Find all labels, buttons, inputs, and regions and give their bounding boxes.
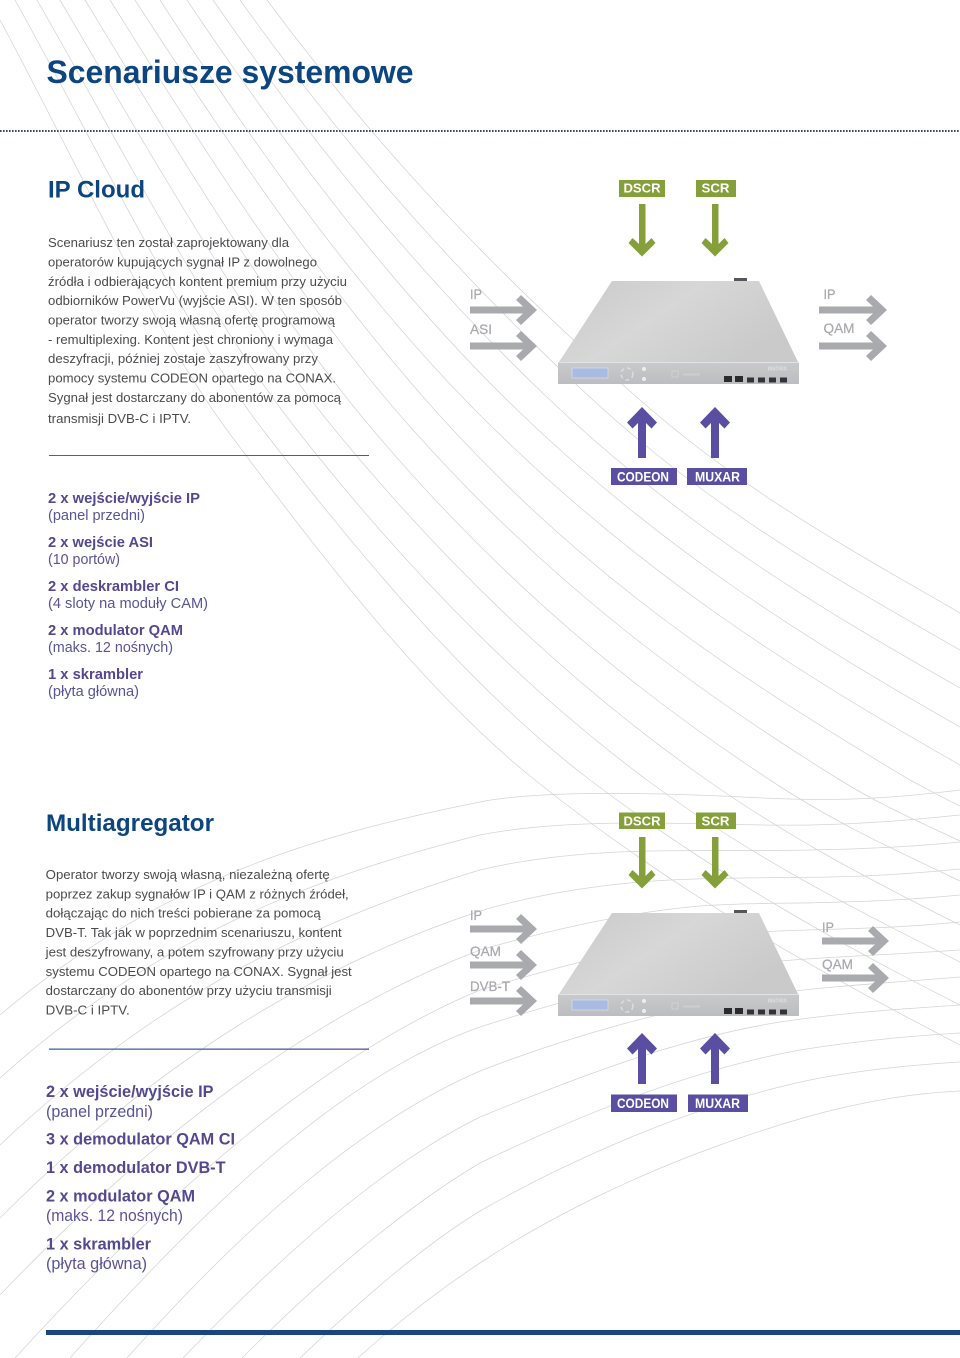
text block: IP Cloud description: operatorów kupujących sygnał IP z dowolnego bbox=[48, 254, 317, 270]
arrow: MUXAR up bbox=[700, 1033, 730, 1084]
label: MUXAR: MUXAR bbox=[695, 470, 740, 484]
arrow label: QAM output: QAM bbox=[824, 321, 854, 336]
text block: Multiagregator description: systemu CODEON opartego na CONAX. Sygnał jest bbox=[46, 964, 352, 979]
text block: Multiagregator description: poprzez zakup sygnałów IP i QAM z różnych źródeł, bbox=[46, 886, 349, 902]
feature list: IP Cloud: (maks. 12 nośnych) bbox=[48, 640, 173, 656]
arrow: DVB-T input bbox=[470, 986, 537, 1016]
arrow label: IP output: IP bbox=[822, 920, 834, 935]
arrow label: QAM output: QAM bbox=[822, 957, 853, 972]
arrow: MUXAR up bbox=[700, 407, 730, 458]
arrow: CODEON up bbox=[627, 407, 657, 458]
text block: IP Cloud description: pomocy systemu CODEON opartego na CONAX. bbox=[48, 370, 336, 386]
label: SCR bbox=[696, 180, 736, 197]
arrow: DSCR down bbox=[628, 837, 656, 888]
feature list: IP Cloud: 2 x modulator QAM bbox=[48, 623, 183, 639]
arrow label: DVB-T input: DVB-T bbox=[470, 979, 510, 994]
text block: IP Cloud description: transmisji DVB-C i IPTV. bbox=[48, 411, 191, 426]
label: CODEON: CODEON bbox=[617, 470, 669, 484]
arrow: IP output bbox=[819, 295, 887, 325]
feature list: Multiagregator: (płyta główna) bbox=[46, 1255, 147, 1273]
arrow: QAM output bbox=[822, 963, 889, 993]
feature list: Multiagregator: 1 x demodulator DVB-T bbox=[46, 1159, 226, 1177]
label: DSCR: DSCR bbox=[624, 181, 661, 196]
arrow: QAM input bbox=[470, 950, 537, 980]
feature list: IP Cloud: (płyta główna) bbox=[48, 684, 139, 700]
feature list: IP Cloud: (4 sloty na moduły CAM) bbox=[48, 596, 208, 612]
text block: IP Cloud description bbox=[48, 235, 347, 426]
heading: IP Cloud: IP Cloud bbox=[48, 176, 145, 204]
text block: IP Cloud description: Sygnał jest dostarczany do abonentów za pomocą bbox=[48, 390, 342, 405]
feature list: Multiagregator: (maks. 12 nośnych) bbox=[46, 1207, 183, 1225]
text block: IP Cloud description: Scenariusz ten został zaprojektowany dla bbox=[48, 235, 290, 250]
feature list: Multiagregator: 2 x wejście/wyjście IP bbox=[46, 1083, 214, 1101]
device bbox=[558, 278, 799, 384]
arrow: ASI input bbox=[470, 331, 537, 361]
label: SCR bbox=[696, 812, 736, 829]
text block: IP Cloud description: odbiorników PowerVu (wyjście ASI). W ten sposób bbox=[48, 293, 342, 308]
arrow: CODEON up bbox=[627, 1033, 657, 1084]
arrow: DSCR down bbox=[628, 204, 656, 256]
feature list: IP Cloud: 2 x wejście/wyjście IP bbox=[48, 491, 200, 507]
text block: IP Cloud description: deszyfracji, później zostaje zaszyfrowany przy bbox=[48, 351, 318, 366]
device: MATRIX bbox=[768, 998, 787, 1004]
arrow: SCR down bbox=[702, 204, 728, 256]
text block: Multiagregator description: jest deszyfrowany, a potem szyfrowany przy użyciu bbox=[45, 944, 344, 960]
device bbox=[558, 910, 799, 1016]
arrow label: IP input: IP bbox=[470, 908, 482, 923]
feature list: IP Cloud: (10 portów) bbox=[48, 552, 120, 568]
footer bar bbox=[46, 1330, 960, 1335]
label: MUXAR: MUXAR bbox=[695, 1096, 740, 1111]
feature list: IP Cloud: 2 x wejście ASI bbox=[48, 535, 153, 551]
arrow: QAM output bbox=[819, 331, 887, 361]
arrow: IP input bbox=[470, 914, 537, 944]
label: CODEON: CODEON bbox=[617, 1096, 669, 1111]
arrow label: IP output: IP bbox=[824, 287, 836, 302]
diagram: Multiagregator bbox=[470, 812, 889, 1112]
arrow label: IP input: IP bbox=[470, 287, 482, 302]
arrow: SCR down bbox=[702, 837, 728, 888]
feature list: IP Cloud: 1 x skrambler bbox=[48, 667, 143, 683]
text block: IP Cloud description: - remultiplexing. Kontent jest chroniony i wymaga bbox=[48, 332, 334, 347]
text block: Multiagregator description: DVB-C i IPTV. bbox=[46, 1002, 130, 1018]
text block: Multiagregator description: dostarczany do abonentów przy użyciu transmisji bbox=[46, 983, 332, 998]
feature list: Multiagregator: 3 x demodulator QAM CI bbox=[46, 1130, 235, 1148]
feature list: IP Cloud: (panel przedni) bbox=[48, 508, 145, 524]
feature list: Multiagregator: 1 x skrambler bbox=[46, 1236, 152, 1254]
feature list: Multiagregator: (panel przedni) bbox=[46, 1103, 153, 1121]
feature list: Multiagregator bbox=[46, 1083, 235, 1273]
text block: IP Cloud description: operator tworzy swoją własną ofertę programową bbox=[48, 312, 336, 328]
label: SCR: SCR bbox=[702, 181, 730, 196]
feature list: IP Cloud: 2 x deskrambler CI bbox=[48, 579, 179, 595]
arrow: IP output bbox=[822, 926, 889, 956]
text block: IP Cloud description: źródła i odbierających kontent premium przy użyciu bbox=[48, 274, 347, 289]
title: Scenariusze systemowe bbox=[46, 54, 414, 90]
arrow label: QAM input: QAM bbox=[470, 944, 501, 959]
text block: Multiagregator description bbox=[45, 867, 352, 1018]
arrow: IP input bbox=[470, 295, 537, 325]
arrow label: ASI input: ASI bbox=[470, 322, 492, 337]
device: MATRIX bbox=[768, 366, 787, 372]
heading: Multiagregator: Multiagregator bbox=[46, 810, 214, 837]
feature list: Multiagregator: 2 x modulator QAM bbox=[46, 1188, 195, 1206]
text block: Multiagregator description: Operator tworzy swoją własną, niezależną ofertę bbox=[46, 867, 330, 882]
label: DSCR: DSCR bbox=[624, 814, 661, 828]
diagram: IP Cloud bbox=[470, 180, 887, 485]
label: SCR: SCR bbox=[702, 814, 730, 828]
text block: Multiagregator description: DVB-T. Tak jak w poprzednim scenariuszu, kontent bbox=[46, 925, 342, 940]
feature list: IP Cloud bbox=[48, 491, 208, 700]
text block: Multiagregator description: dołączając do nich treści pobierane za pomocą bbox=[46, 906, 321, 920]
